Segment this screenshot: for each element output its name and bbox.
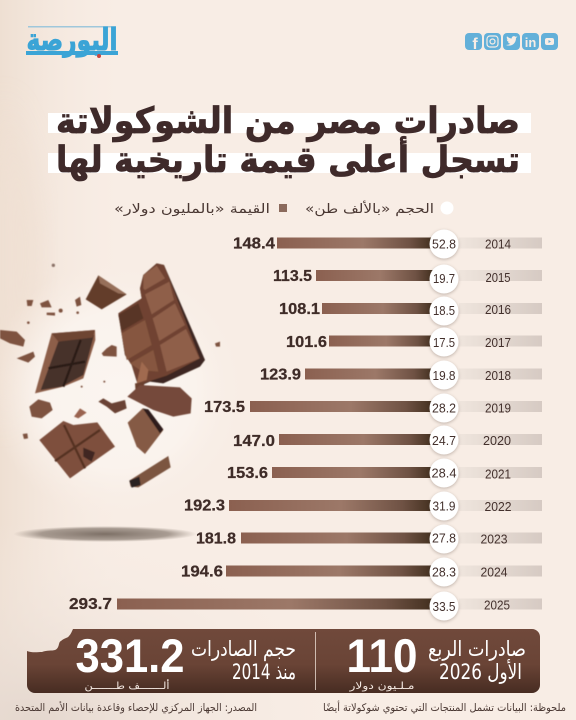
row 2022: 2022	[484, 499, 512, 514]
row 2015: 2015	[486, 270, 510, 285]
row 2023: 2023	[480, 532, 508, 546]
row 2016: 108.1	[279, 301, 320, 318]
title	[48, 101, 531, 181]
chocolate stick	[129, 456, 171, 488]
row 2015	[273, 264, 542, 294]
chocolate fragment top	[86, 275, 127, 309]
note: ملحوظة: البيانات تشمل المنتجات التي تحتوي شوكولاتة أيضًا	[323, 700, 566, 714]
row 2024	[181, 558, 542, 586]
chocolate bar large	[118, 263, 205, 397]
stat: total volume since 2014: 331.2	[76, 629, 184, 682]
dark chocolate square	[35, 330, 95, 393]
floor shadow	[13, 526, 197, 542]
row 2025	[69, 592, 542, 620]
social icons	[465, 33, 558, 53]
row 2019	[204, 394, 542, 422]
row 2021: 2021	[485, 466, 511, 482]
legend: volume	[305, 200, 454, 217]
row 2015: 113.5	[273, 268, 312, 285]
row 2020	[233, 426, 542, 454]
row 2025: 2025	[484, 598, 510, 612]
title highlight strips	[48, 113, 531, 173]
row 2022	[184, 492, 542, 520]
row 2024: 194.6	[181, 564, 223, 580]
row 2014: 52.8	[432, 236, 456, 252]
row 2022: 31.9	[432, 498, 456, 514]
row 2020: 147.0	[233, 433, 275, 450]
panel background with bite	[27, 629, 540, 693]
row 2018	[260, 360, 542, 390]
row 2021: 28.4	[432, 466, 456, 480]
bar chart	[69, 230, 542, 620]
chocolate illustration	[0, 263, 220, 488]
row 2014	[233, 230, 542, 258]
row 2017: 101.6	[286, 334, 327, 351]
title line 1: صادرات مصر من الشوكولاتة	[56, 101, 520, 142]
stat: Q1 2026 exports: الأول 2026	[439, 659, 522, 684]
row 2022: 192.3	[184, 498, 225, 514]
row 2017: 17.5	[433, 335, 455, 350]
row 2025: 33.5	[432, 599, 456, 614]
stat: total volume since 2014: منذ 2014	[232, 660, 296, 684]
logo: Al Borsa: البورصة	[26, 23, 118, 58]
legend: value: القيمة «بالمليون دولار»‏	[114, 202, 270, 217]
icon: linkedin: in	[525, 35, 536, 50]
row 2014: 2014	[485, 236, 511, 252]
row 2016: 18.5	[433, 303, 455, 318]
stat: Q1 2026 exports	[346, 629, 526, 692]
icon: twitter	[503, 33, 520, 50]
stat: Q1 2026 exports: صادرات الربع	[428, 637, 526, 661]
row 2017: 2017	[485, 335, 511, 350]
row 2019: 2019	[485, 400, 511, 416]
stat: Q1 2026 exports: 110	[346, 629, 418, 682]
row 2018: 2018	[485, 368, 511, 383]
row 2024: 28.3	[432, 564, 456, 580]
row 2025: 293.7	[69, 596, 112, 613]
source: المصدر: الجهاز المركزي للإحصاء وقاعدة بيانات الأمم المتحدة	[15, 701, 257, 714]
legend: volume: الحجم «بالألف طن»‏	[305, 200, 434, 217]
stat: Q1 2026 exports: مـلـيون دولار	[348, 681, 414, 692]
row 2016: 2016	[485, 302, 511, 317]
row 2023: 27.8	[432, 530, 456, 546]
legend	[114, 200, 454, 217]
row 2018: 19.8	[432, 368, 456, 383]
row 2021	[227, 458, 542, 488]
chocolate piece broken right	[127, 385, 192, 417]
row 2018: 123.9	[260, 366, 301, 384]
row 2014: 148.4	[233, 236, 275, 252]
stat: total volume since 2014: ألـــــــف طـــــــن	[84, 679, 170, 692]
row 2024: 2024	[480, 564, 508, 580]
crumbs	[0, 264, 220, 439]
stat: total volume since 2014	[76, 629, 296, 692]
chocolate square bottom	[39, 421, 115, 478]
chocolate piece square	[128, 408, 163, 454]
row 2020: 24.7	[432, 433, 456, 448]
icon: facebook: f	[472, 36, 478, 53]
row 2019: 173.5	[204, 399, 245, 416]
row 2021: 153.6	[227, 465, 268, 482]
summary panel	[27, 629, 540, 693]
title line 2: تسجل أعلى قيمة تاريخية لها	[56, 136, 520, 181]
row 2023: 181.8	[196, 530, 236, 548]
panel divider	[315, 632, 316, 690]
icon: instagram	[484, 33, 501, 50]
row 2020: 2020	[483, 433, 511, 448]
row 2015: 19.7	[433, 271, 455, 286]
row 2017	[286, 328, 542, 356]
row 2016	[279, 296, 542, 326]
row 2019: 28.2	[432, 400, 456, 416]
stat: total volume since 2014: حجم الصادرات	[191, 637, 296, 662]
icon: youtube	[541, 33, 558, 50]
row 2023	[196, 524, 542, 554]
